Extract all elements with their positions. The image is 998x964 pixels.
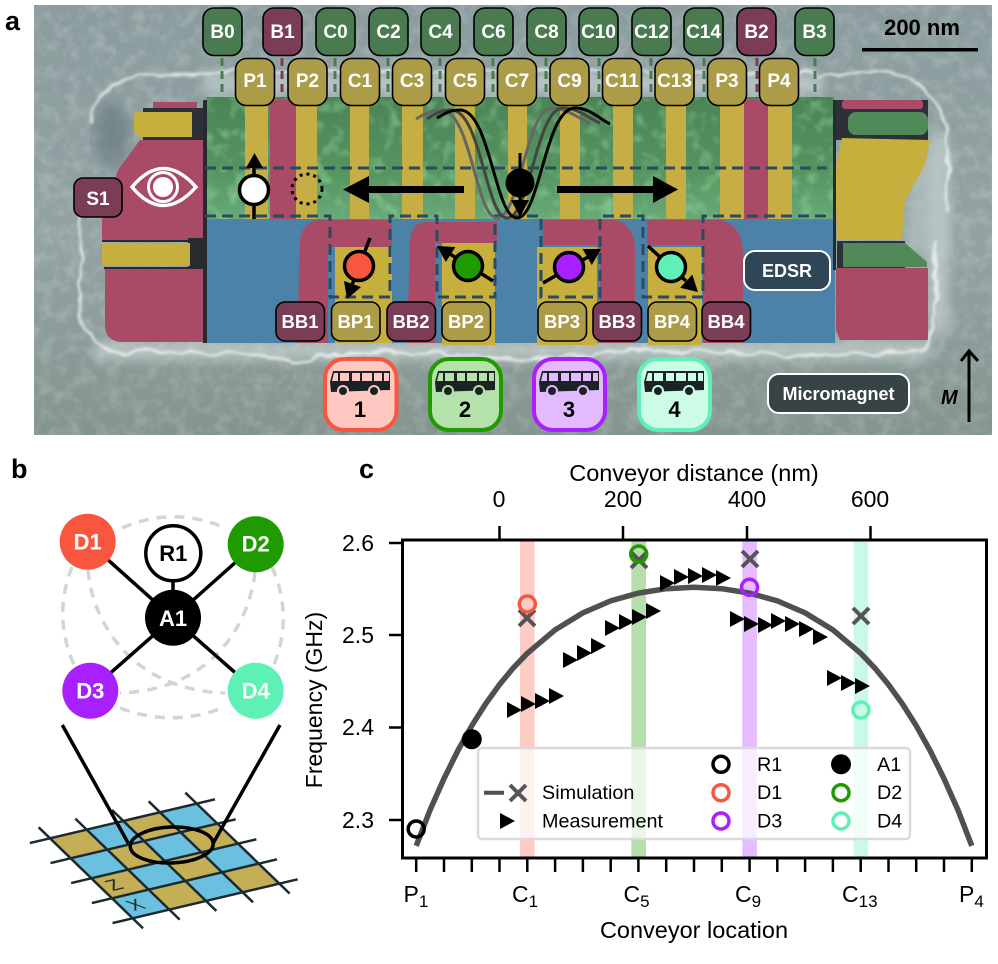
shuttling potential wave [416,108,610,218]
SEM background [34,5,992,435]
y axis ticks and labels: 2.3 [342,807,374,833]
simulation curve [416,587,972,846]
spin markers [408,546,869,837]
legend: D1 [757,782,782,804]
y axis ticks and labels [342,530,402,833]
second row gate labels [236,58,798,106]
Micromagnet label [768,374,909,413]
bottom gate labels [276,302,750,341]
legend: Measurement [542,810,663,832]
bottom axis labels [404,881,984,911]
second row gate labels: P1 [243,71,267,92]
surface code lattice: Z [101,876,128,894]
node D3 [62,663,118,719]
y axis title: Frequency (GHz) [301,612,327,788]
bottom gate labels: BP3 [544,311,580,332]
left contact block [102,100,207,343]
bus icon tile 2 [430,359,501,430]
panel b: qubit connectivity and surface code [18,514,308,933]
top axis ticks and labels: 400 [728,486,766,512]
top row gate labels [203,8,834,56]
bottom gate labels: BB1 [281,311,319,332]
top row gate labels: B3 [802,22,827,43]
dashed connectivity arcs [63,517,283,718]
legend: D3 [757,810,782,832]
node D4: D4 [242,678,271,704]
bottom axis labels: C [512,881,529,907]
dashed quantum dot channel outlines [205,168,832,297]
second row gate labels: C9 [557,71,582,92]
panel a: SEM device image [34,5,992,435]
dotted empty site [292,174,322,204]
S1 label [74,178,122,217]
second row gate labels: C5 [453,71,478,92]
gate connector dashes [222,58,815,98]
bus icon tile 1 [325,359,396,430]
bottom axis labels: 5 [640,892,650,911]
EDSR label: EDSR [762,261,812,281]
bus icon tile 4 [639,359,710,430]
magnetisation arrow M: M [941,387,959,409]
Micromagnet label: Micromagnet [782,384,895,404]
panel letter a: a [5,6,21,36]
measurement triangles [507,567,870,718]
bottom gate labels: BB2 [392,311,430,332]
bottom plunger and barrier gates [297,220,743,345]
device gates: coloured overlay [102,97,930,345]
node D1: D1 [74,530,102,554]
readout eye icon [132,168,196,206]
bus icon tile 2: 2 [459,397,471,422]
surface code lattice: X [122,896,151,914]
second row gate labels: C11 [605,71,639,92]
readout spin R1 [240,153,268,219]
legend: D4 [877,810,902,832]
bottom gate labels: BB4 [707,311,745,332]
top row gate labels: C14 [686,22,721,43]
node A1 [145,590,201,646]
bottom axis labels: 1 [419,892,428,911]
top row gate labels: B0 [210,22,235,43]
EDSR label [744,251,830,290]
y axis ticks and labels: 2.6 [342,530,374,556]
bottom axis labels: C [842,881,859,907]
second row gate labels: C13 [657,71,692,92]
bottom axis labels: C [735,881,752,907]
top axis ticks and labels: 0 [493,486,505,512]
bottom axis labels: 1 [529,892,538,911]
top row gate labels: C12 [634,22,669,43]
legend: D2 [877,782,902,804]
right contact block [833,100,930,340]
shuttling spin A1 [506,153,534,217]
legend: A1 [877,754,901,776]
second row gate labels: P3 [715,71,739,92]
node D2 [228,516,284,572]
y axis ticks and labels: 2.4 [342,714,374,740]
panel c: frequency chart [301,460,986,943]
legend: R1 [757,754,782,776]
node A1: A1 [159,606,187,631]
second row gate labels: P2 [296,71,319,92]
bottom axis labels: P [959,881,974,907]
bus icon tile 4: 4 [668,397,681,422]
top axis ticks and labels: 600 [851,486,889,512]
top row gate labels: B2 [744,22,769,43]
chart frame [402,540,986,858]
bus icon tile 3 [534,359,605,430]
bus icon tile 1: 1 [354,397,366,422]
node R1 [146,526,201,581]
top row gate labels: C6 [481,22,506,43]
bottom axis labels: 13 [859,892,878,911]
arrow: right shuttle [557,176,678,203]
node R1: R1 [159,541,187,566]
top row gate labels: C0 [323,22,348,43]
bottom axis ticks [416,859,972,872]
connecting spokes [88,542,256,691]
bottom axis labels: 9 [752,892,761,911]
bus icon tile 3: 3 [563,397,575,422]
node D3: D3 [76,678,104,704]
top axis ticks and labels: 200 [604,486,642,512]
top axis ticks and labels [493,486,889,540]
top row gate labels: C8 [534,22,559,43]
colored location bands [520,540,868,858]
top axis title: Conveyor distance (nm) [569,460,819,486]
second row gate labels: C1 [348,71,373,92]
node D4 [228,663,284,719]
bottom gate labels: BP1 [338,311,374,332]
panel letter c: c [359,454,374,484]
spin D2 [437,246,493,281]
second row gate labels: C7 [505,71,529,92]
spin D3 [543,249,601,283]
legend: Simulation [542,782,634,804]
bottom gate labels: BB3 [598,311,636,332]
surface code lattice [18,788,308,933]
y axis ticks and labels: 2.5 [342,622,374,648]
scale bar: 200 nm [884,15,960,40]
second row gate labels: P4 [767,71,791,92]
spin D1 [344,238,374,299]
simulation crosses [519,551,869,626]
top row gate labels: C10 [581,22,616,43]
arrow: left shuttle [343,176,464,203]
node D1 [60,514,116,570]
bottom axis labels: 4 [974,892,984,911]
top row gate labels: C4 [428,22,453,43]
top row gate labels: B1 [270,22,295,43]
bottom axis labels: P [404,881,419,907]
bottom gate labels: BP2 [448,311,484,332]
node D2: D2 [242,532,270,556]
legend [478,748,910,839]
spin D4 [648,246,698,292]
bottom axis title: Conveyor location [600,917,788,943]
bottom gate labels: BP4 [654,311,691,332]
panel letter b: b [11,454,28,484]
bottom axis labels: C [624,881,640,907]
second row gate labels: C3 [400,71,424,92]
zoom lines and ellipse [62,725,280,864]
magnetisation arrow M [941,351,978,422]
S1 label: S1 [86,189,110,210]
top row gate labels: C2 [376,22,401,43]
scale bar [862,15,978,52]
